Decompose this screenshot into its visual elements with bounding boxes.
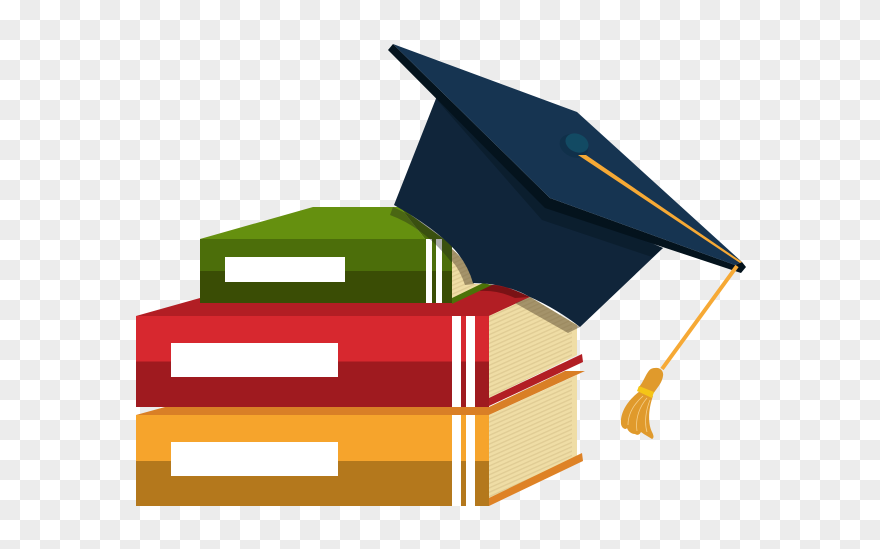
board top — [393, 44, 742, 265]
board edge — [388, 44, 746, 273]
tassel band — [637, 386, 654, 398]
red book — [136, 284, 583, 407]
graduation cap — [388, 44, 746, 327]
orange book — [136, 371, 585, 506]
tassel — [621, 266, 737, 439]
cap body — [394, 96, 663, 327]
cap shadow under board — [437, 100, 663, 257]
button — [556, 130, 592, 162]
green book — [200, 207, 492, 304]
tassel cord — [662, 266, 737, 369]
tassel head — [638, 368, 663, 394]
tassel cord on board — [578, 155, 742, 263]
fringe — [621, 391, 654, 439]
